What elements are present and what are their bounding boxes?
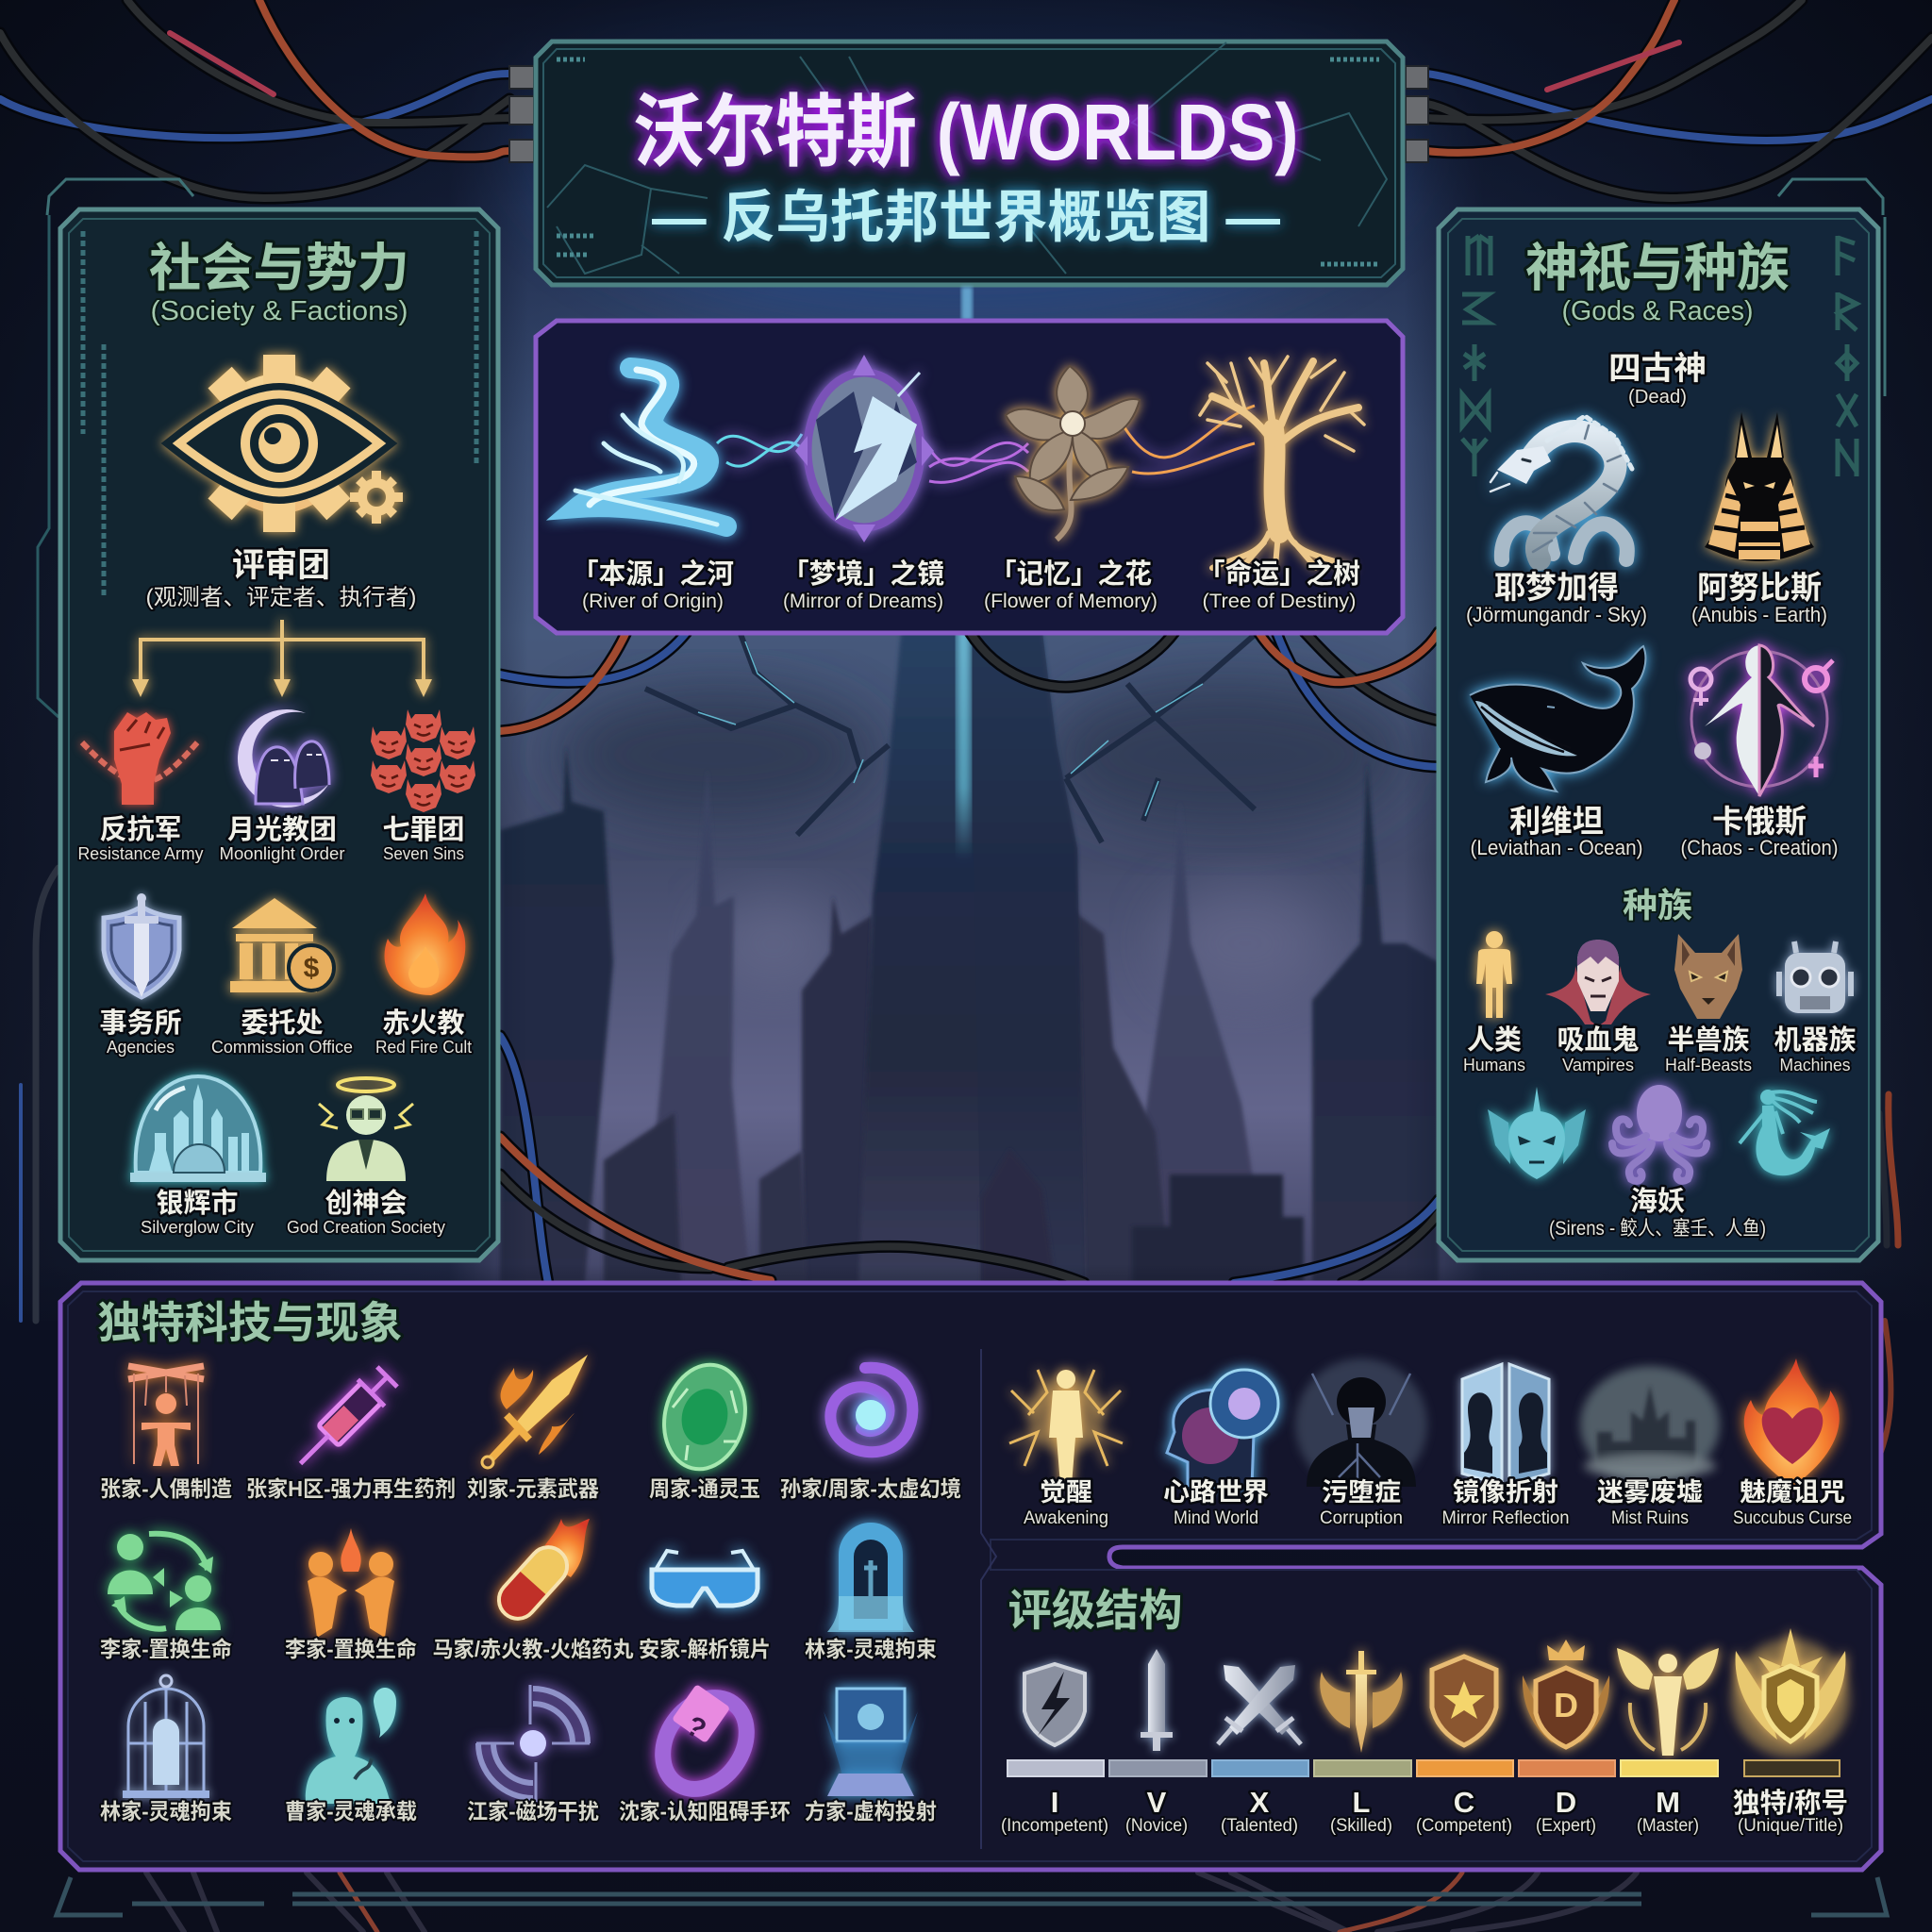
labels: technology grid: 刘家-元素武器 [467,1476,599,1501]
labels: sky and earth gods: (Jörmungandr - Sky) [1466,603,1647,626]
data columns [83,231,476,599]
rank labels: (Talented) [1221,1816,1298,1836]
labels: ocean and creation gods [1470,804,1838,859]
rank labels: V [1147,1786,1167,1819]
icon: unique title radiant shield [1732,1628,1849,1757]
icon: resistance fist and chains [82,712,199,805]
labels: phenomena: Mind World [1174,1508,1258,1528]
cosmic item labels: 「命运」之树 [1198,558,1360,590]
subheading: four old gods [1608,351,1707,408]
icon: river of origin [575,368,726,526]
heading: 社会与势力 [149,239,409,297]
icon: commission office bank and coin: $ [304,953,320,984]
icon: life swap figures [108,1534,221,1630]
labels: sky and earth gods: 阿努比斯 [1697,570,1822,605]
runes left and right [1462,236,1857,476]
labels: phenomena: 觉醒 [1040,1478,1092,1507]
labels: technology grid: 李家-置换生命 [100,1637,232,1661]
labels: ocean and creation gods: (Chaos - Creation) [1681,836,1838,859]
labels: technology grid: 曹家-灵魂承载 [285,1799,417,1824]
labels: faction row three: God Creation Society [287,1218,445,1237]
label: sirens [1549,1186,1766,1240]
labels: faction row two: Agencies [107,1038,175,1057]
labels: races: 吸血鬼 [1557,1024,1640,1056]
subheading: four old gods: 四古神 [1608,351,1707,387]
labels: faction row one: 月光教团 [227,814,337,845]
labels: races: 人类 [1467,1024,1522,1056]
labels: faction row two: 赤火教 [382,1008,465,1039]
cosmic item labels: 「记忆」之花 [990,558,1152,590]
icon: succubus curse [1744,1358,1840,1487]
labels: phenomena [1024,1478,1852,1528]
labels: faction row three: 银辉市 [156,1188,239,1219]
icon: soul containment tube [827,1523,914,1632]
icon: rank X crossed swords [1218,1665,1301,1744]
icon: rank D crowned shield: D [1554,1686,1578,1724]
labels: faction row three: Silverglow City [141,1218,254,1237]
icon: seven sins devils [371,709,475,812]
labels: technology grid: 方家-虚构投射 [805,1799,937,1824]
label: tribunal: 评审团 [232,547,330,584]
rank labels: X [1250,1786,1270,1819]
labels: phenomena: 心路世界 [1163,1478,1269,1507]
panel: technology, phenomena and ranks [60,1283,1881,1870]
labels: faction row one: Seven Sins [383,844,464,863]
cosmic item labels: 「梦境」之镜 [782,558,944,590]
labels: faction row one: Resistance Army [77,844,204,863]
rank labels: (Expert) [1536,1816,1596,1836]
bottom panel frame [60,1283,1881,1870]
light beam between panels [961,287,973,321]
labels: sky and earth gods [1466,570,1827,626]
icon: tree of destiny [1200,357,1364,568]
labels: sky and earth gods: 耶梦加得 [1494,570,1619,605]
icon: mermaid [1740,1090,1830,1175]
labels: faction row one: 七罪团 [382,815,465,845]
icon: rank D crowned shield [1523,1640,1609,1747]
icon: human [1476,931,1512,1018]
icon: cognition bracelet [645,1681,764,1806]
icon: anubis head [1705,412,1814,561]
panel: cosmic elements [536,321,1403,633]
heading: technology: 独特科技与现象 [98,1298,403,1347]
title frame [536,42,1403,285]
labels: technology grid: 林家-灵魂拘束 [100,1799,232,1824]
cosmic panel frame [536,321,1403,633]
icon: spirit jade [654,1357,756,1477]
cosmic item labels [572,558,1360,612]
labels: technology grid: 江家-磁场干扰 [467,1799,599,1824]
icon: commission office bank and coin [230,898,334,992]
icon: rank M winged figure [1617,1648,1719,1756]
label: tribunal: (观测者、评定者、执行者) [145,585,417,610]
icon: corruption [1295,1358,1427,1491]
rank labels: M [1656,1786,1680,1819]
title text: 沃尔特斯 (WORLDS) [634,88,1298,176]
labels: faction row one [77,814,465,863]
icon: awakening [1009,1370,1123,1485]
labels: phenomena: Mirror Reflection [1441,1508,1570,1528]
heading english: (Gods & Races) [1562,296,1753,326]
labels: faction row one: 反抗军 [99,814,182,845]
gods panel inner line [1448,219,1869,1251]
rank labels: (Novice) [1125,1816,1188,1836]
labels: phenomena: 魅魔诅咒 [1740,1478,1845,1507]
rank labels: (Competent) [1416,1816,1512,1836]
icon: silverglow city dome [130,1076,266,1182]
icon: magnetic interference [476,1685,590,1802]
subtitle text: — 反乌托邦世界概览图 — [652,186,1280,249]
rank labels: D [1556,1786,1576,1819]
labels: faction row two: Red Fire Cult [375,1038,472,1057]
heading: rating structure: 评级结构 [1008,1586,1183,1635]
divider notch [981,1349,996,1849]
icon: holographic projector [824,1689,918,1796]
labels: ocean and creation gods: 利维坦 [1509,804,1604,839]
labels: sky and earth gods: (Anubis - Earth) [1691,603,1827,626]
skyline [500,745,613,1283]
rank labels: (Skilled) [1330,1816,1392,1836]
labels: ocean and creation gods: 卡俄斯 [1712,804,1807,839]
labels: races: 机器族 [1774,1024,1857,1056]
icon: puppet [128,1366,204,1466]
rank color bars [1008,1760,1840,1776]
icon: jiaoren fish face [1488,1087,1586,1179]
labels: faction row three [141,1188,445,1237]
labels: phenomena: 镜像折射 [1453,1478,1558,1507]
heading: 神祇与种族 [1525,239,1790,297]
labels: technology grid: 周家-通灵玉 [649,1476,760,1501]
panel: gods and races [1439,209,1878,1260]
labels: faction row two: 委托处 [241,1008,324,1039]
icon: flame pill [491,1519,590,1626]
label: tribunal [145,547,417,610]
label: sirens: (Sirens - 鲛人、塞壬、人鱼) [1549,1218,1766,1240]
cosmic item labels: 「本源」之河 [572,558,734,590]
icon: all-seeing eye in a gear [179,355,403,532]
labels: technology grid: 安家-解析镜片 [639,1637,771,1661]
labels: races: Humans [1463,1056,1525,1074]
icon: vampire [1545,940,1651,1026]
labels: races: Half-Beasts [1665,1056,1752,1074]
icon: agency shield and sword [104,893,179,997]
icon: void vortex [830,1368,912,1452]
rank labels: I [1051,1786,1058,1819]
panel: society and factions [60,209,498,1260]
icon: half-beast wolf [1674,934,1742,1019]
icon: rank C star shield [1432,1657,1496,1745]
sky cracks [645,634,1256,842]
cosmic item labels: (Flower of Memory) [984,591,1158,612]
icon: god creation society figure with halo [319,1078,413,1181]
icon: soul bearer ghost [306,1688,396,1804]
rank labels: (Unique/Title) [1738,1816,1843,1836]
labels: technology grid: 张家H区-强力再生药剂 [246,1476,456,1501]
society panel detail [69,219,490,1251]
subheading: races: 种族 [1623,886,1692,924]
labels: technology grid: 张家-人偶制造 [100,1476,232,1501]
labels: phenomena: 迷雾废墟 [1597,1478,1703,1507]
icon: analysis goggles [652,1551,758,1606]
rank labels: L [1353,1786,1370,1819]
icon: mist ruins [1580,1366,1720,1483]
labels: phenomena: Succubus Curse [1733,1508,1852,1528]
labels: phenomena: Mist Ruins [1611,1508,1689,1528]
labels: races [1463,1024,1857,1074]
icon: elemental sword [482,1355,588,1468]
cosmic item labels: (River of Origin) [582,591,724,612]
labels: phenomena: Awakening [1024,1508,1108,1528]
icon: rank V sword [1141,1649,1173,1751]
icon: soul cage [123,1675,209,1798]
labels: faction row two [99,1008,472,1057]
labels: faction row two: Commission Office [211,1038,353,1057]
icon: cognition bracelet: ? [681,1710,711,1746]
bottom panel inner line [68,1291,1872,1861]
society panel frame [60,209,498,1260]
labels: faction row two: 事务所 [99,1008,182,1039]
labels: ocean and creation gods: (Leviathan - Ocean) [1470,836,1643,859]
icon: octopus [1612,1085,1707,1181]
labels: races: Machines [1779,1056,1851,1074]
icon: chaos androgyne [1690,645,1833,796]
icon: rank L winged sword [1320,1651,1403,1753]
labels: faction row three: 创神会 [325,1188,408,1219]
panel: title [536,42,1403,285]
rank labels: C [1454,1786,1474,1819]
labels: faction row one: Moonlight Order [219,844,345,863]
heading english: (Society & Factions) [151,296,408,326]
label: sirens: 海妖 [1630,1186,1685,1217]
icon: flower of memory [1006,366,1140,540]
icon: leviathan whale [1470,646,1645,791]
labels: phenomena: 污堕症 [1322,1478,1401,1507]
icon: rank I broken shield [1024,1664,1085,1745]
icon: mirror of dreams [795,355,934,542]
connecting energy threads [717,406,1255,482]
title frame detail and cracks [543,42,1395,277]
icon: moon and hooded figures [238,709,329,808]
icon: mirror reflection [1462,1364,1549,1485]
rank labels: (Master) [1637,1816,1699,1836]
title data readouts [557,59,1379,264]
subheading: four old gods: (Dead) [1628,387,1687,408]
icon: mind world [1167,1370,1278,1487]
icon: syringe [287,1363,401,1477]
labels: technology grid: 沈家-认知阻碍手环 [619,1799,791,1824]
cosmic item labels: (Mirror of Dreams) [783,591,943,612]
cable connectors [509,66,1428,162]
icon: life swap flame figures [308,1528,394,1638]
icon: robot [1779,941,1851,1013]
rank labels: 独特/称号 [1733,1788,1848,1819]
arrows: tribunal to factions [132,620,432,697]
labels: races: 半兽族 [1667,1024,1750,1056]
rank labels [1001,1786,1848,1836]
gods panel frame [1439,209,1878,1260]
cosmic item labels: (Tree of Destiny) [1202,591,1357,612]
labels: technology grid [100,1476,961,1824]
labels: technology grid: 马家/赤火教-火焰药丸 [432,1637,634,1661]
labels: races: Vampires [1562,1056,1634,1074]
icon: jormungandr serpent [1491,416,1632,559]
icon: red fire cult flame [385,893,465,995]
labels: technology grid: 孙家/周家-太虚幻境 [780,1476,961,1501]
rank labels: (Incompetent) [1001,1816,1108,1836]
labels: phenomena: Corruption [1320,1508,1403,1528]
labels: technology grid: 李家-置换生命 [285,1637,417,1661]
labels: technology grid: 林家-灵魂拘束 [805,1637,937,1661]
